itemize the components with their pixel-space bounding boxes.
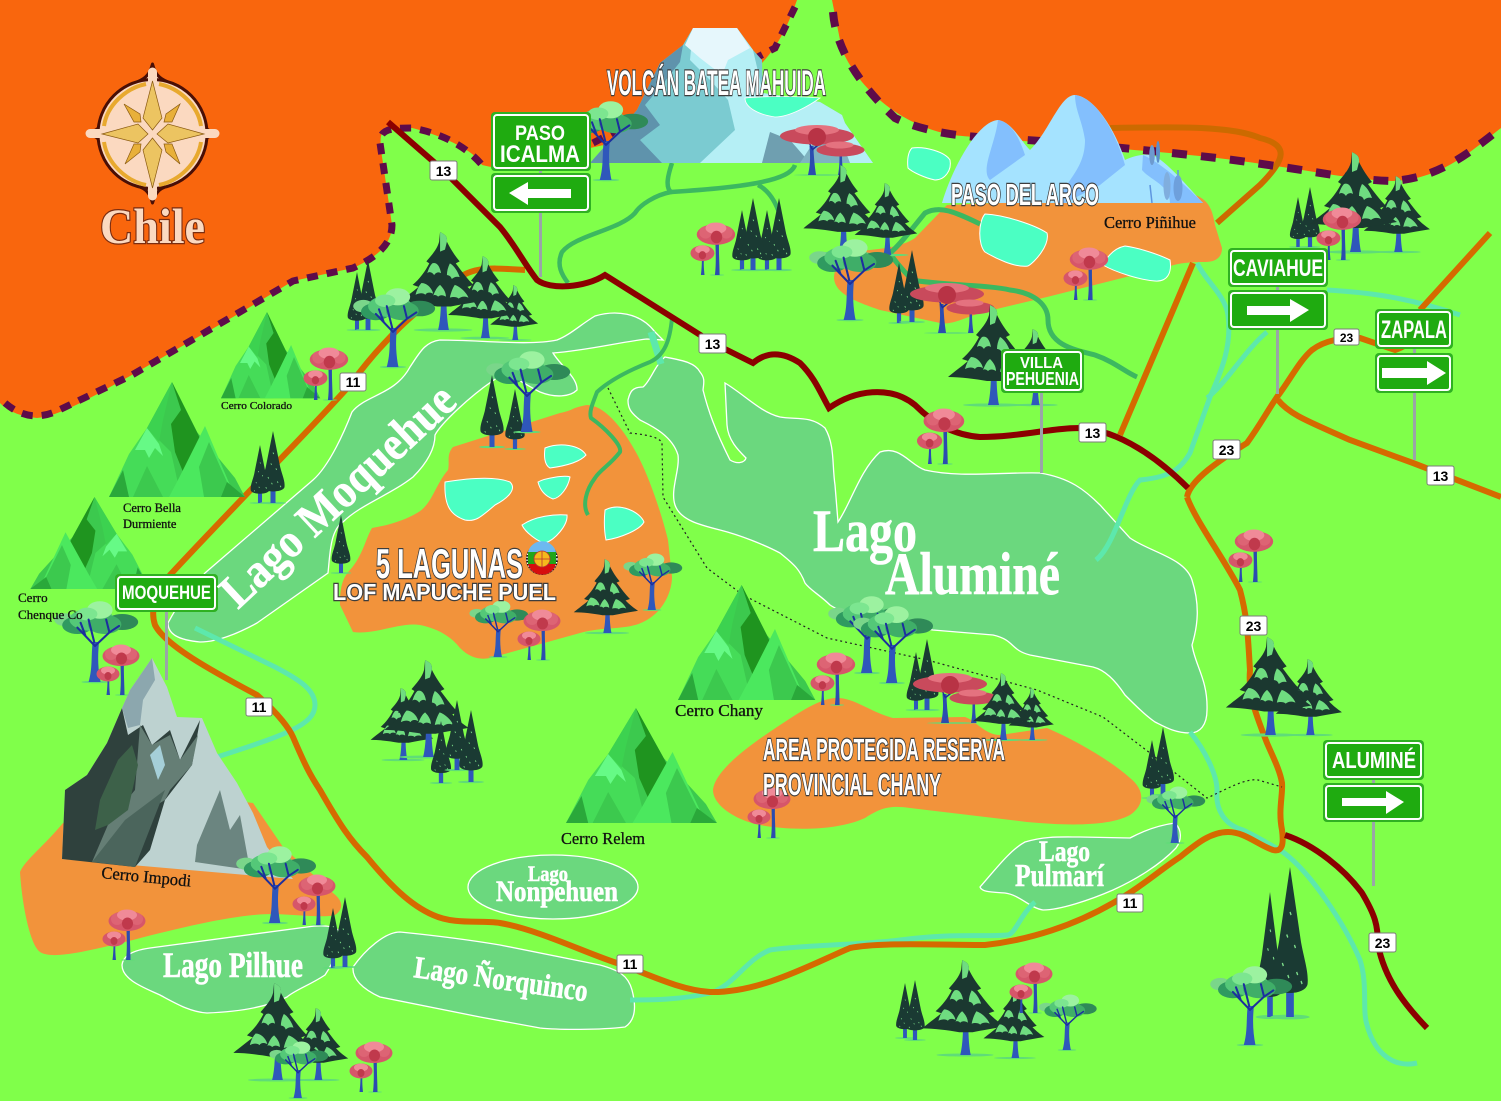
road: branch to Piñihue: [1120, 263, 1193, 435]
trees: 5 Lagunas cluster: [469, 351, 682, 661]
road: branch to border NE: [1420, 233, 1490, 310]
mountain: Paso del Arco: [942, 95, 1203, 203]
route badges: 13: [436, 163, 451, 179]
icon: compass rose: [87, 64, 217, 203]
label: Cerro Bella Durmiente: Cerro Bella: [123, 501, 181, 515]
panel: Cerro Impodi area: [20, 790, 341, 955]
route badges: 23: [1375, 935, 1390, 951]
mountain: Cerro Bella Durmiente: [109, 382, 245, 497]
route badges: 11: [623, 956, 638, 972]
label: Cerro Bella Durmiente: Durmiente: [123, 517, 177, 531]
mountain: Cerro Chany: [678, 585, 815, 700]
sign: Villa Pehuenia: [1001, 349, 1084, 473]
sign: Moquehue: [115, 574, 218, 680]
route badges: 11: [346, 374, 361, 390]
label: Area Protegida Reserva Provincial Chany: AREA PROTEGIDA RESERVA: [763, 732, 1005, 767]
label: Cerro Relem: Cerro Relem: [561, 829, 645, 848]
trees: south west cluster: [102, 846, 392, 1099]
rivers: green streams: [560, 163, 1137, 515]
sign: Caviahue: [1228, 248, 1328, 394]
trees: Chany cluster: [748, 596, 1205, 844]
road: ruta 23 south: [1285, 835, 1427, 1028]
panel: 5 Lagunas area: [340, 405, 672, 659]
route badges: [246, 161, 1454, 973]
trees: north cluster: [566, 101, 1108, 465]
route badges: 11: [252, 699, 267, 715]
route badges: 23: [1340, 331, 1353, 345]
mountain: Cerro Colorado: [221, 312, 320, 398]
sign: Villa Pehuenia: PEHUENIA: [1006, 369, 1079, 389]
road: ruta 13 east: [1278, 400, 1501, 497]
label: Lago Aluminé: Aluminé: [885, 541, 1060, 607]
label: Lago Moquehue: Lago Moquehue: [209, 373, 466, 618]
text: VOLCÁN BATEA MAHUIDA: [607, 63, 826, 103]
label: Paso del Arco: PASO DEL ARCO: [951, 177, 1099, 212]
dotted trail: [608, 388, 1282, 798]
icon: Mapuche flag: [526, 541, 558, 575]
road: ruta 11: [153, 269, 1283, 992]
sign: Caviahue: CAVIAHUE: [1233, 255, 1323, 282]
label: Lof Mapuche Puel: LOF MAPUCHE PUEL: [333, 579, 556, 605]
label: Cerro Chenque Co: Chenque Co: [18, 607, 83, 622]
sign: Paso Icalma: ICALMA: [500, 141, 580, 168]
label: Cerro Chany: Cerro Chany: [675, 701, 764, 720]
route badges: 11: [1123, 895, 1138, 911]
label: Area Protegida Reserva Provincial Chany: [763, 732, 1005, 802]
sign: Paso Icalma: [491, 112, 591, 277]
label: Lago Pulmarí: [1015, 835, 1105, 893]
panel: Paso del Arco / Cerro Piñihue area: [834, 195, 1222, 323]
lake: Lago Aluminé: [628, 357, 1207, 733]
label: 5 Lagunas: 5 LAGUNAS: [376, 540, 523, 587]
label: Lago Nonpehuen: [496, 861, 618, 908]
panel: Chile territory east: [832, 0, 1501, 181]
label: Lago Nonpehuen: Nonpehuen: [496, 875, 618, 908]
mountain: Cerro Impodi: [62, 658, 293, 879]
lake: Lago Ñorquinco: [353, 932, 634, 1029]
label: Lago Pulmarí: Pulmarí: [1015, 857, 1105, 893]
sign: Zapala: ZAPALA: [1381, 316, 1447, 344]
label: Cerro Chenque Co: Cerro: [18, 590, 48, 605]
lake: Lago Pulmarí: [980, 823, 1180, 910]
sign: Moquehue: MOQUEHUE: [122, 583, 211, 604]
lake: Lago Nonpehuen: [468, 855, 638, 919]
border line east: [833, 12, 1501, 181]
lagunas: Paso del Arco: [908, 148, 1170, 281]
rivers: light rivers: [195, 263, 1460, 1064]
title: Chile: Chile: [100, 198, 205, 254]
road on Chilean side: [1110, 127, 1281, 223]
sign: Paso Icalma: PASO: [515, 122, 565, 145]
mountain: Volcán Batea Mahuida: [590, 28, 873, 163]
lake: Lago Moquehue: [168, 313, 663, 642]
label: Lago Aluminé: Lago: [813, 498, 917, 564]
label: Cerro Piñihue: Cerro Piñihue: [1104, 213, 1196, 232]
panel: Chile territory west: [0, 0, 797, 418]
route badges: 23: [1246, 618, 1261, 634]
route badges: 13: [705, 336, 720, 352]
panel: Area Protegida Chany: [713, 698, 1141, 829]
lagunas: 5 Lagunas: [445, 445, 644, 543]
mountain: Cerro Chenque Co: [30, 497, 150, 589]
border line west: [5, 3, 797, 416]
sign: Aluminé: [1323, 740, 1424, 886]
route badges: 23: [1219, 442, 1234, 458]
trees: centre cluster: [371, 660, 484, 784]
trees: south east cluster: [895, 867, 1310, 1059]
lake: Lago Pilhue: [122, 926, 340, 1013]
trees: Moquehue cluster: [54, 232, 538, 696]
label: Lago Nonpehuen: Lago: [528, 861, 568, 886]
sign: Villa Pehuenia: VILLA: [1020, 355, 1063, 372]
route badges: 13: [1085, 425, 1100, 441]
road: ruta 23 north: [1187, 330, 1425, 497]
road: ruta 13 north: [388, 122, 1188, 488]
route badges: 13: [1433, 468, 1448, 484]
label: Area Protegida Reserva Provincial Chany: PROVINCIAL CHANY: [763, 767, 941, 802]
mountain: Cerro Relem: [566, 708, 717, 823]
label: Lago Ñorquinco: Lago Ñorquinco: [412, 949, 590, 1008]
label: Lago Pulmarí: Lago: [1039, 835, 1090, 868]
sign: Zapala: [1375, 309, 1453, 460]
label: Cerro Colorado: Cerro Colorado: [221, 400, 293, 412]
label: Lago Pilhue: Lago Pilhue: [163, 945, 303, 985]
trees: north east cluster: [1226, 152, 1430, 737]
label: Cerro Impodi: Cerro Impodi: [101, 863, 192, 891]
sign: Aluminé: ALUMINÉ: [1332, 746, 1416, 773]
